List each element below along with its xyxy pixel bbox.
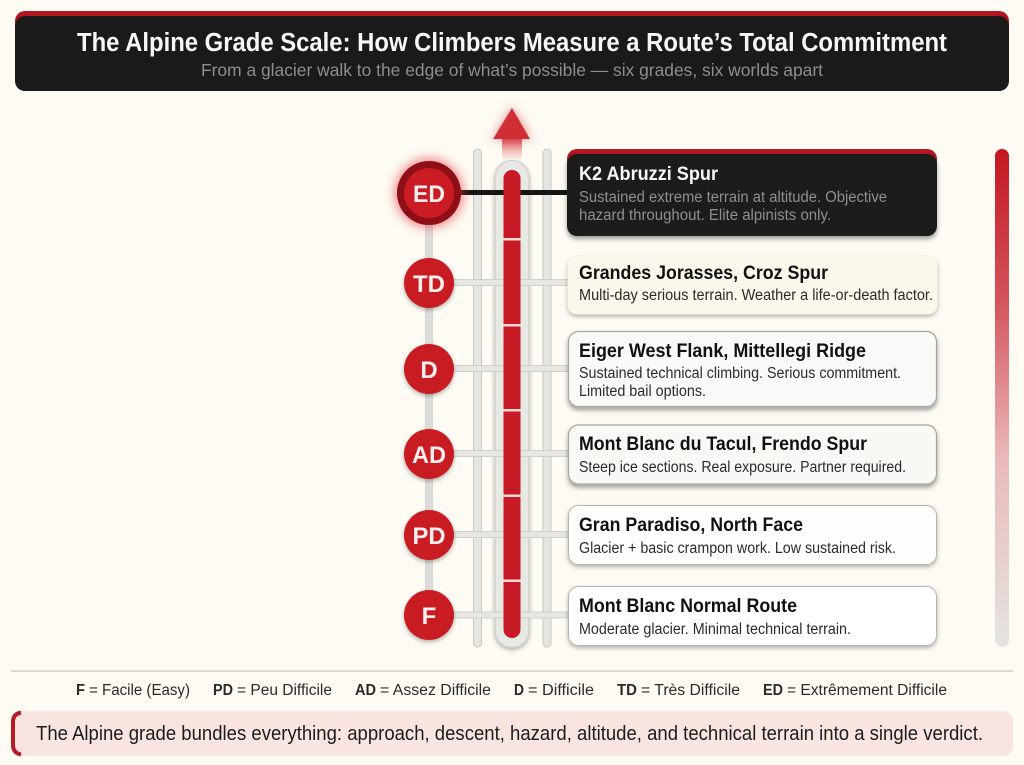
- card: Gran Paradiso: [568, 506, 936, 564]
- legend: = Extrêmement Difficile: [787, 682, 947, 699]
- segment dividers: [503, 238, 521, 582]
- legend: AD: [355, 682, 376, 699]
- grade badge: ED: ED: [413, 181, 445, 208]
- card: K2 Abruzzi Spur: Sustained extreme terrain at altitude. Objective: [579, 189, 887, 206]
- side rails: [474, 149, 551, 647]
- connector spine: [426, 193, 432, 615]
- grade badge: PD: [404, 510, 454, 560]
- card: Mont Blanc Normal Route: [568, 586, 936, 646]
- card: Mont Blanc du Tacul: Steep ice sections. Real exposure. Partner required.: [579, 459, 906, 476]
- callout: [11, 711, 1013, 756]
- icon: upward arrow: [493, 107, 531, 159]
- grade badge: D: [404, 344, 454, 394]
- legend: = Peu Difficile: [237, 682, 332, 699]
- card: Grandes Jorasses: Multi-day serious terrain. Weather a life-or-death factor.: [579, 287, 933, 304]
- grade badge: ED: [394, 158, 464, 228]
- header banner: [15, 11, 1009, 91]
- card: Eiger: Eiger West Flank, Mittellegi Ridge: [579, 340, 866, 362]
- legend: = Difficile: [528, 682, 594, 699]
- card: Mont Blanc Normal Route: Mont Blanc Normal Route: [579, 595, 797, 617]
- grade badge: AD: AD: [412, 442, 446, 469]
- card: K2 Abruzzi Spur: hazard throughout. Elite alpinists only.: [579, 207, 831, 224]
- grade badge: TD: TD: [413, 271, 445, 298]
- card: Grandes Jorasses: Grandes Jorasses, Croz Spur: [579, 262, 828, 284]
- legend: = Très Difficile: [641, 682, 740, 699]
- legend: [76, 682, 947, 699]
- grade badge: D: D: [420, 357, 438, 384]
- legend: ED: [763, 682, 783, 699]
- grade badge: PD: PD: [412, 523, 446, 550]
- card: Eiger: Limited bail options.: [579, 383, 706, 400]
- card: K2 Abruzzi Spur: [567, 149, 937, 236]
- card: Mont Blanc Normal Route: Moderate glacier. Minimal technical terrain.: [579, 621, 851, 638]
- card: K2 Abruzzi Spur: K2 Abruzzi Spur: [579, 163, 718, 185]
- legend: PD: [213, 682, 233, 699]
- divider: [11, 670, 1013, 672]
- card: Gran Paradiso: Gran Paradiso, North Face: [579, 514, 803, 536]
- grade badge: AD: [404, 429, 454, 479]
- legend: D: [514, 682, 524, 699]
- legend: TD: [617, 682, 637, 699]
- thermometer fill: [503, 170, 521, 638]
- card: Mont Blanc du Tacul: [568, 425, 936, 484]
- grade badge: F: F: [422, 603, 436, 630]
- card: Eiger: Sustained technical climbing. Serious commitment.: [579, 365, 901, 382]
- connectors to cards: [450, 280, 568, 618]
- thermometer casing: [495, 160, 529, 648]
- grade badge: TD: [404, 258, 454, 308]
- title: The Alpine Grade Scale: How Climbers Measure a Route’s Total Commitment: [77, 29, 947, 57]
- legend: F: [76, 682, 85, 699]
- subtitle: From a glacier walk to the edge of what’s possible — six grades, six worlds apart: [201, 60, 823, 80]
- card: Gran Paradiso: Glacier + basic crampon work. Low sustained risk.: [579, 540, 896, 557]
- ED connector: [460, 190, 568, 195]
- card: Eiger: [568, 332, 936, 406]
- legend: = Facile (Easy): [89, 682, 190, 699]
- card: Mont Blanc du Tacul: Mont Blanc du Tacul, Frendo Spur: [579, 433, 867, 455]
- legend: = Assez Difficile: [380, 682, 491, 699]
- card: Grandes Jorasses: [568, 256, 938, 314]
- grade badge: F: [404, 590, 454, 640]
- severity gradient bar: [995, 149, 1009, 647]
